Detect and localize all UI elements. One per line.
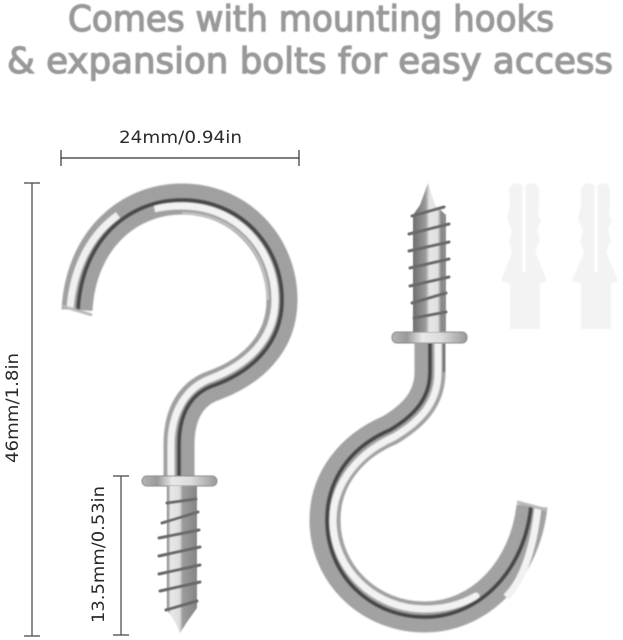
height dimension: 46mm/1.8in: [3, 183, 40, 636]
title: & expansion bolts for easy access: [7, 41, 613, 82]
wall anchor 2: [572, 183, 618, 329]
anchor 1 slit: [522, 184, 526, 272]
thread dimension: 13.5mm/0.53in: 13.5mm/0.53in: [89, 486, 109, 623]
right hook: [325, 343, 547, 617]
left flange: [142, 476, 217, 486]
width dimension: 24mm/0.94in: 24mm/0.94in: [119, 128, 242, 148]
width dimension: 24mm/0.94in: [61, 128, 299, 166]
hook end: [517, 502, 547, 510]
height dimension: 46mm/1.8in: 46mm/1.8in: [3, 353, 23, 463]
hook tube: [70, 199, 282, 478]
hook tip: [62, 306, 92, 315]
wall anchor 1: [501, 183, 547, 329]
title: Comes with mounting hooks: [68, 0, 554, 40]
hook tube: [325, 343, 538, 617]
thread dimension: 13.5mm/0.53in: [89, 476, 129, 635]
anchor 2 slit: [594, 184, 598, 272]
right flange: [392, 332, 467, 343]
left hook: [62, 199, 282, 478]
left screw threads: [159, 499, 200, 610]
right screw threads: [409, 207, 449, 318]
left screw: [159, 486, 200, 633]
right screw: [409, 183, 449, 332]
title: [7, 0, 613, 82]
